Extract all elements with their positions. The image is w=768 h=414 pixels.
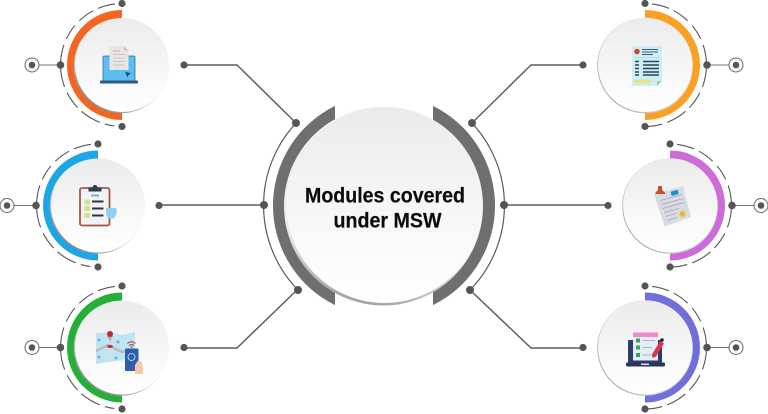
disc: [74, 18, 169, 113]
blue half ring: [43, 150, 98, 260]
dashed arc: [645, 4, 706, 126]
node: bottom left, green: [25, 282, 188, 413]
green half ring: [67, 292, 122, 402]
connector lines: [159, 65, 608, 348]
dashed arc: [37, 144, 98, 267]
node: middle right, violet: [604, 140, 768, 271]
disc: [597, 300, 693, 396]
central hub: [260, 94, 508, 316]
node: top left, orange: [25, 0, 188, 130]
disc: [597, 18, 693, 113]
node: top right, amber: [579, 0, 743, 130]
hub disc: [284, 106, 483, 306]
dashed arc: [645, 286, 706, 409]
connector dots and target: [0, 140, 163, 271]
icon: clipboard checklist: [80, 185, 116, 226]
connector dots and target: [579, 0, 743, 130]
connector dots and target: [579, 282, 743, 413]
hub grey ring: [273, 106, 495, 305]
indigo half ring: [645, 292, 700, 402]
connector dots and target: [25, 0, 188, 130]
hub thin arcs: [264, 123, 504, 290]
dashed arc: [61, 286, 122, 409]
icon: laptop with document: [100, 46, 138, 84]
amber half ring: [645, 10, 700, 120]
disc: [622, 158, 718, 254]
connector dots and target: [604, 140, 768, 271]
node: bottom right, indigo: [579, 282, 743, 413]
icon: stamped paper: [654, 186, 691, 226]
title: Modules covered: [305, 184, 465, 208]
dashed arc: [61, 4, 122, 126]
orange half ring: [67, 10, 122, 120]
disc: [50, 158, 145, 254]
icon: laptop with checklist and pencil: [626, 332, 665, 366]
icon: map and phone: [96, 331, 143, 374]
disc: [74, 300, 169, 396]
connector dots and target: [25, 282, 188, 413]
violet half ring: [670, 150, 725, 260]
title: under MSW: [334, 210, 442, 232]
hub connector dots: [260, 119, 508, 294]
icon: certificate document: [632, 46, 662, 86]
dashed arc: [670, 144, 731, 267]
node: middle left, blue: [0, 140, 163, 271]
